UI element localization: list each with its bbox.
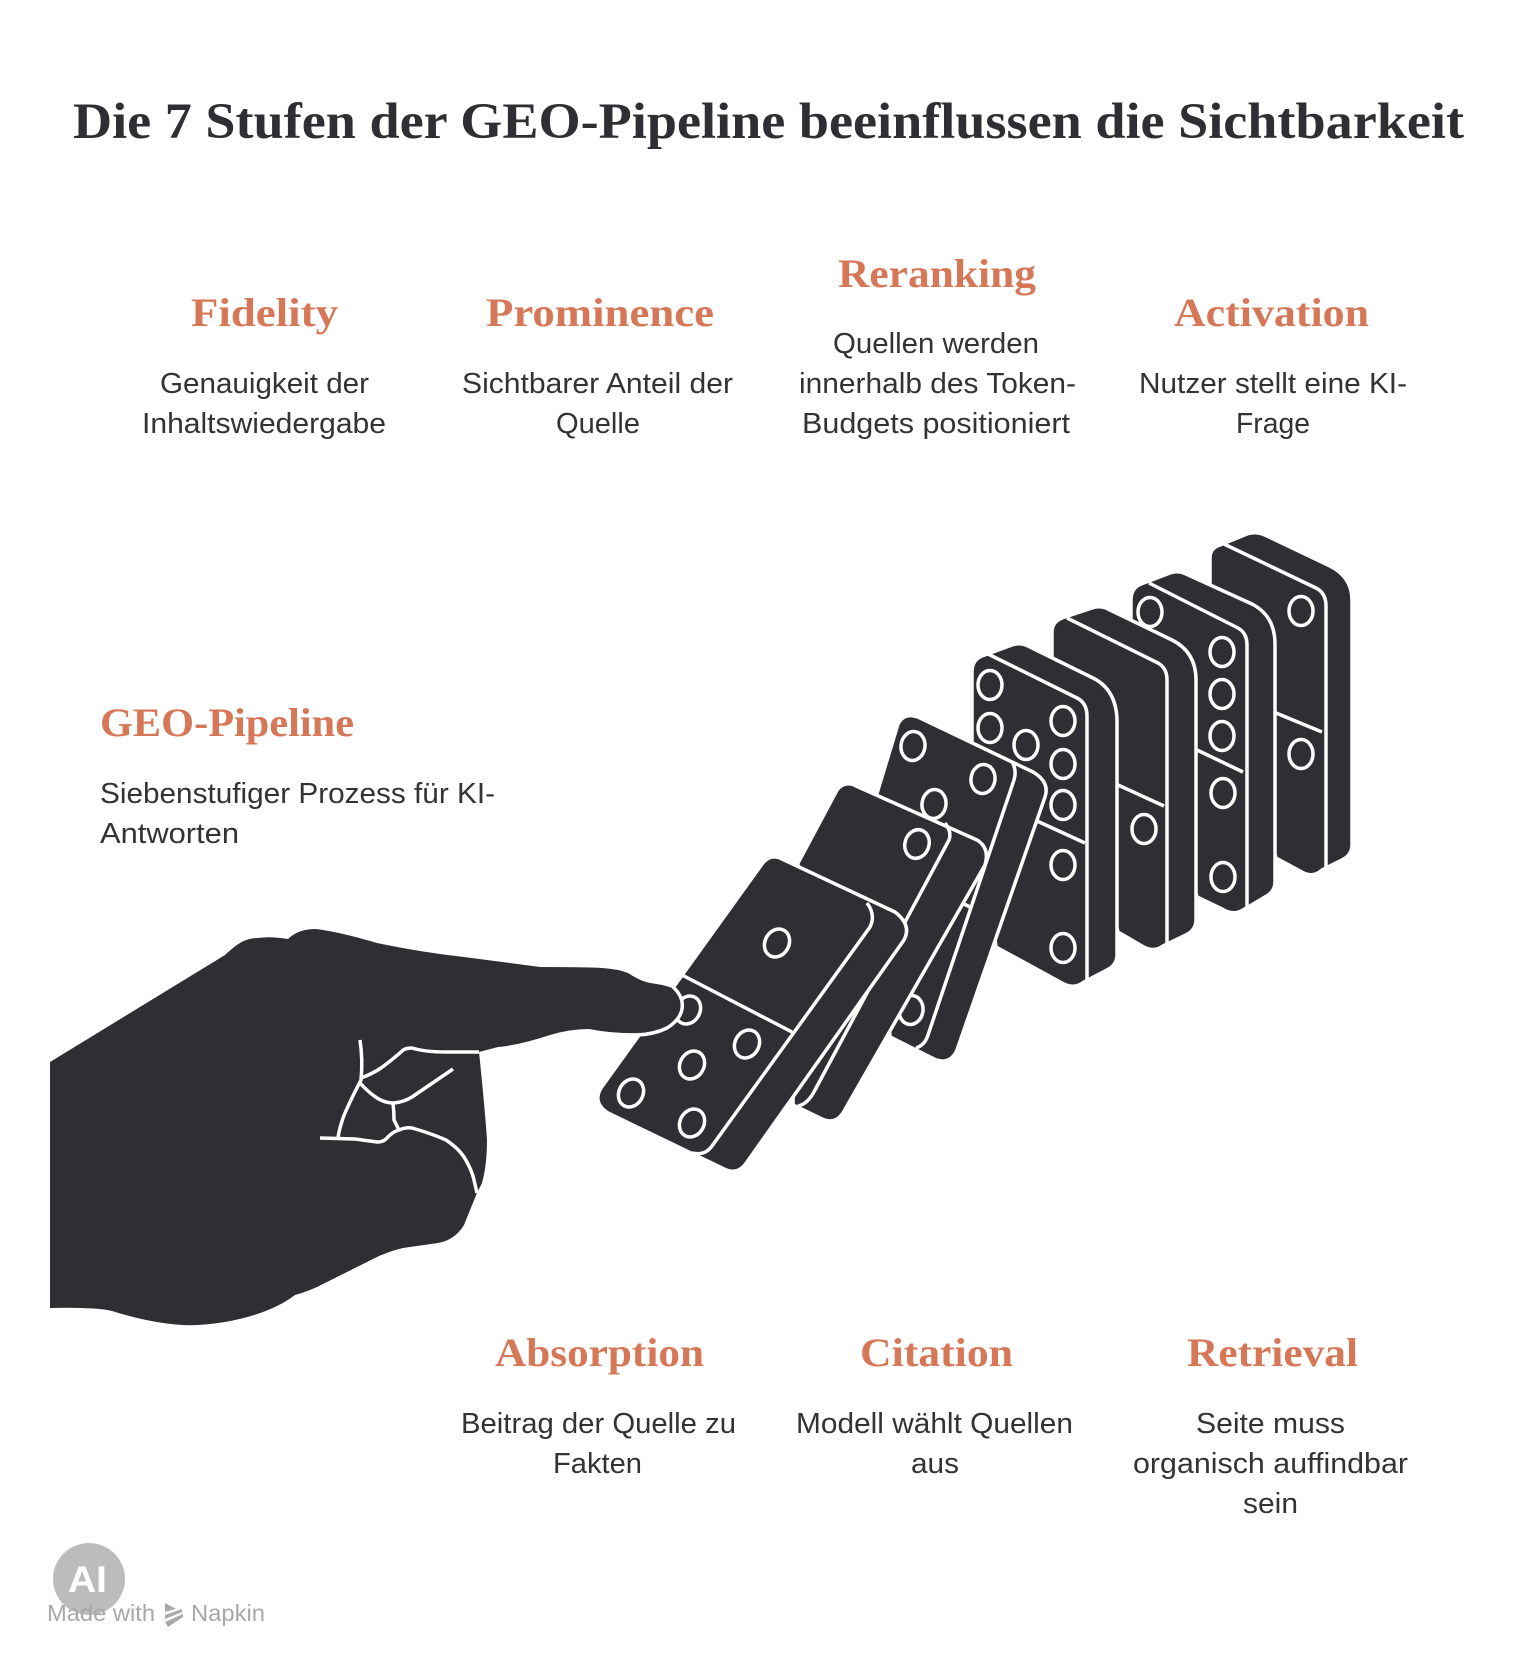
panel: Prominence: Quelle [556, 408, 640, 440]
panel: Absorption: Absorption [495, 1330, 704, 1375]
panel: Activation: Frage [1236, 408, 1310, 440]
panel: Reranking [799, 251, 1076, 440]
panel: Reranking: Quellen werden [833, 328, 1039, 360]
panel: Retrieval: organisch auffindbar [1133, 1448, 1408, 1480]
panel: GEO-Pipeline [100, 700, 495, 850]
watermark: made with Napkin: Made with [47, 1600, 155, 1626]
domino 1 [598, 857, 907, 1171]
panel: Fidelity [142, 290, 386, 440]
illustration: pointing hand [50, 929, 683, 1325]
watermark: AI badge [53, 1543, 125, 1615]
domino 4 [972, 644, 1117, 986]
panel: Retrieval: Retrieval [1187, 1330, 1358, 1375]
panel: GEO-Pipeline: Siebenstufiger Prozess für KI- [100, 778, 495, 810]
title: Die 7 Stufen der GEO-Pipeline beeinflussen die Sichtbarkeit [73, 94, 1464, 150]
panel: GEO-Pipeline: Antworten [100, 818, 239, 850]
panel: Prominence [462, 290, 733, 440]
panel: Prominence: Prominence [486, 290, 714, 335]
panel: Activation: Nutzer stellt eine KI- [1139, 368, 1407, 400]
panel: Retrieval [1133, 1330, 1408, 1520]
domino 5 [1052, 607, 1196, 950]
domino 6 [1131, 572, 1275, 913]
panel: Citation: Citation [860, 1330, 1013, 1375]
panel: Absorption: Beitrag der Quelle zu [461, 1408, 736, 1440]
panel: Reranking: Reranking [838, 251, 1036, 296]
watermark: made with Napkin: Napkin [191, 1600, 265, 1626]
panel: Citation: Modell wählt Quellen [796, 1408, 1073, 1440]
panel: Reranking: innerhalb des Token- [799, 368, 1076, 400]
panel: Reranking: Budgets positioniert [802, 408, 1070, 440]
domino 3 [875, 716, 1046, 1061]
panel: Fidelity: Inhaltswiedergabe [142, 408, 386, 440]
domino 2 [793, 784, 986, 1121]
panel: Activation [1139, 290, 1407, 440]
panel: GEO-Pipeline: GEO-Pipeline [100, 700, 354, 745]
panel: Absorption: Fakten [553, 1448, 642, 1480]
watermark: made with Napkin [47, 1600, 265, 1627]
panel: Retrieval: Seite muss [1196, 1408, 1345, 1440]
panel: Retrieval: sein [1243, 1488, 1298, 1520]
panel: Activation: Activation [1174, 290, 1369, 335]
panel: Citation: aus [911, 1448, 959, 1480]
domino 7 [1210, 533, 1352, 875]
panel: Fidelity: Fidelity [191, 290, 338, 335]
panel: Absorption [461, 1330, 736, 1480]
watermark: AI badge: AI [68, 1559, 107, 1600]
panel: Fidelity: Genauigkeit der [160, 368, 369, 400]
panel: Citation [796, 1330, 1073, 1480]
panel: Prominence: Sichtbarer Anteil der [462, 368, 733, 400]
illustration: falling dominoes [598, 533, 1352, 1171]
